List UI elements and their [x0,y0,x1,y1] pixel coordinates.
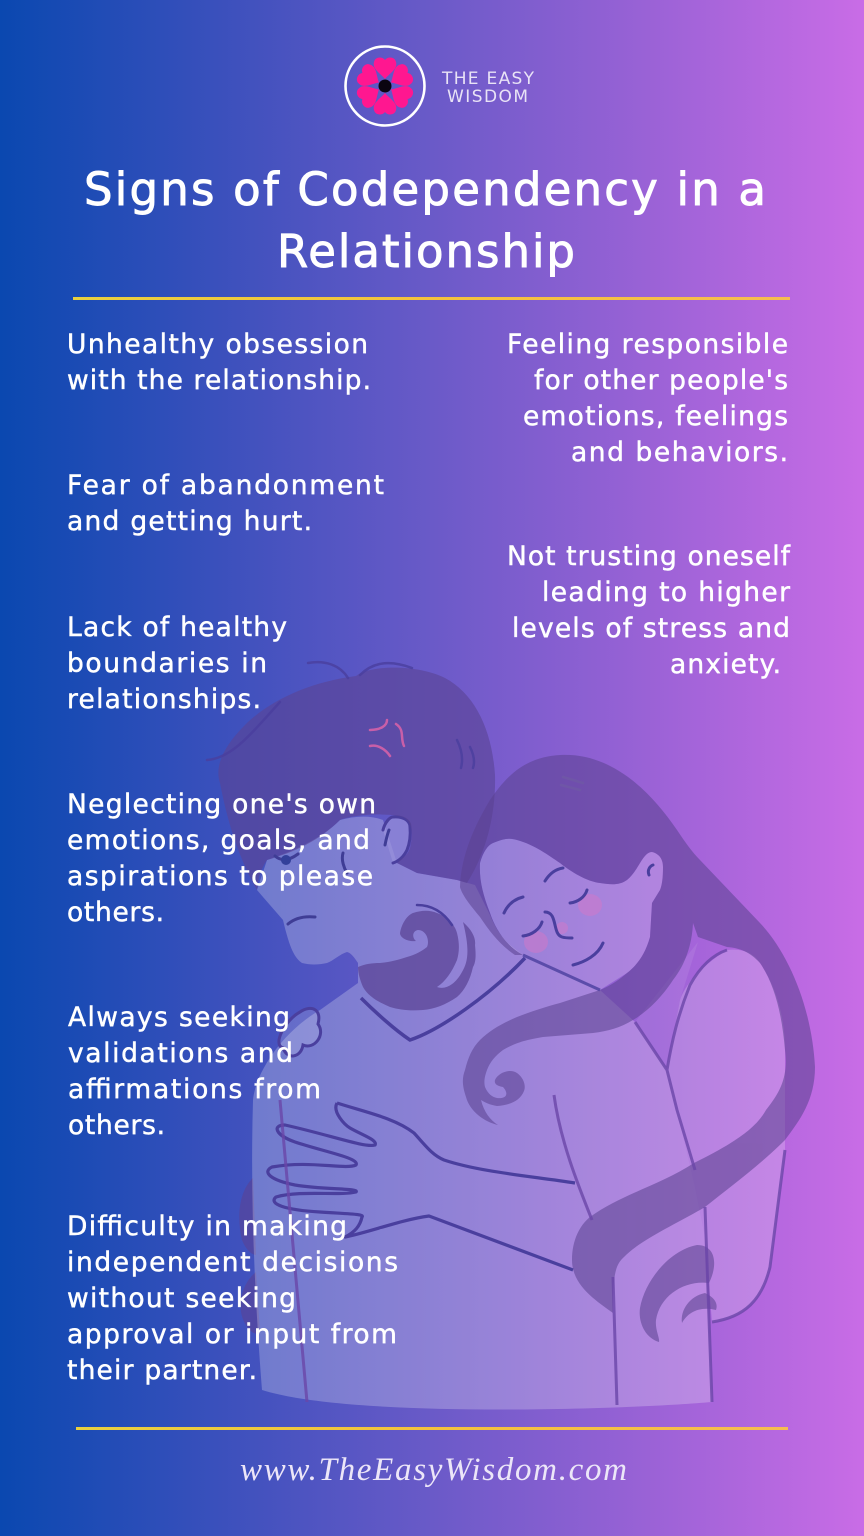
woman's face [480,839,663,990]
man's face, neck and body [252,817,712,1410]
sign: fear of abandonment: and getting hurt. [67,506,312,537]
sign: difficulty deciding: Difficulty in making [67,1211,347,1242]
woman's neck line [523,955,600,990]
head, face-framing loop, long hair and swirl [460,755,815,1313]
anger mark [370,720,404,756]
sign: not trusting oneself: leading to higher [542,577,790,608]
logo wordmark [441,69,535,107]
body contour lines [280,950,785,1405]
sign: not trusting oneself [507,541,791,680]
sign: not trusting oneself: Not trusting oneself [507,541,791,572]
top rule [73,297,790,300]
gap between back and arm [635,942,698,1070]
woman's cheeks and forehead blush [524,894,602,953]
sign: fear of abandonment [67,470,384,537]
sign: feeling responsible: Feeling responsible [507,329,788,360]
woman's facial features [504,865,653,965]
logo flower petals [355,58,415,114]
logo [346,46,535,126]
logo wordmark: WISDOM [447,87,528,107]
sign: fear of abandonment: Fear of abandonment [67,470,384,501]
woman's arm [667,950,785,1322]
bottom rule [76,1427,788,1430]
sign: neglecting self: emotions, goals, and [67,825,370,856]
logo wordmark: THE EASY [441,69,535,89]
title [84,163,766,278]
sign: obsession: with the relationship. [67,365,371,396]
sign: boundaries [67,612,287,715]
logo ring [346,46,424,126]
title: Signs of Codependency in a [84,163,766,216]
sign: not trusting oneself: levels of stress and [512,613,790,644]
neck lock with swirl [358,911,476,1010]
collar [361,958,525,1040]
tail lock near hip [640,1245,714,1342]
sign: seeking validation: validations and [68,1038,293,1069]
sign: not trusting oneself: anxiety. [670,649,781,680]
sign: seeking validation: Always seeking [68,1002,290,1033]
woman's hair tips behind man's left side [239,1178,260,1334]
sign: difficulty deciding [67,1211,398,1386]
sign: obsession: Unhealthy obsession [67,329,368,360]
man's hand on chest [268,1103,575,1270]
sign: boundaries: Lack of healthy [67,612,287,643]
sign: neglecting self: aspirations to please [67,861,373,892]
sign: boundaries: boundaries in [67,648,267,679]
sign: difficulty deciding: their partner. [67,1355,257,1386]
sign: boundaries: relationships. [67,684,261,715]
title: Relationship [277,225,575,278]
sign: feeling responsible [507,329,788,468]
sign: neglecting self [67,789,376,928]
sign: difficulty deciding: approval or input from [67,1319,397,1350]
illustration: embracing couple [207,662,815,1410]
sign: feeling responsible: for other people's [534,365,788,396]
man's hair [218,668,495,890]
sign: seeking validation: others. [68,1110,165,1141]
neck lock top strand [417,905,452,925]
woman's hair lock around man's neck [358,911,476,1010]
sign: seeking validation [68,1002,321,1141]
sign: difficulty deciding: without seeking [67,1283,296,1314]
sign: feeling responsible: emotions, feelings [523,401,788,432]
logo centre [378,80,392,92]
website footer: www.TheEasyWisdom.com [240,1452,627,1488]
sign: obsession [67,329,371,396]
sign: feeling responsible: and behaviors. [571,437,788,468]
man's ear [383,817,410,863]
sign: seeking validation: affirmations from [68,1074,321,1105]
sign: neglecting self: others. [67,897,164,928]
woman's fingers on shoulder [279,1008,321,1056]
man's hair strands [207,662,474,768]
man's facial features [275,830,389,924]
lower tail curl [682,1293,717,1323]
sign: difficulty deciding: independent decisions [67,1247,398,1278]
man's eye [281,855,291,865]
woman's hair [460,755,815,1342]
woman's hair highlight [561,777,583,790]
sign: neglecting self: Neglecting one's own [67,789,376,820]
